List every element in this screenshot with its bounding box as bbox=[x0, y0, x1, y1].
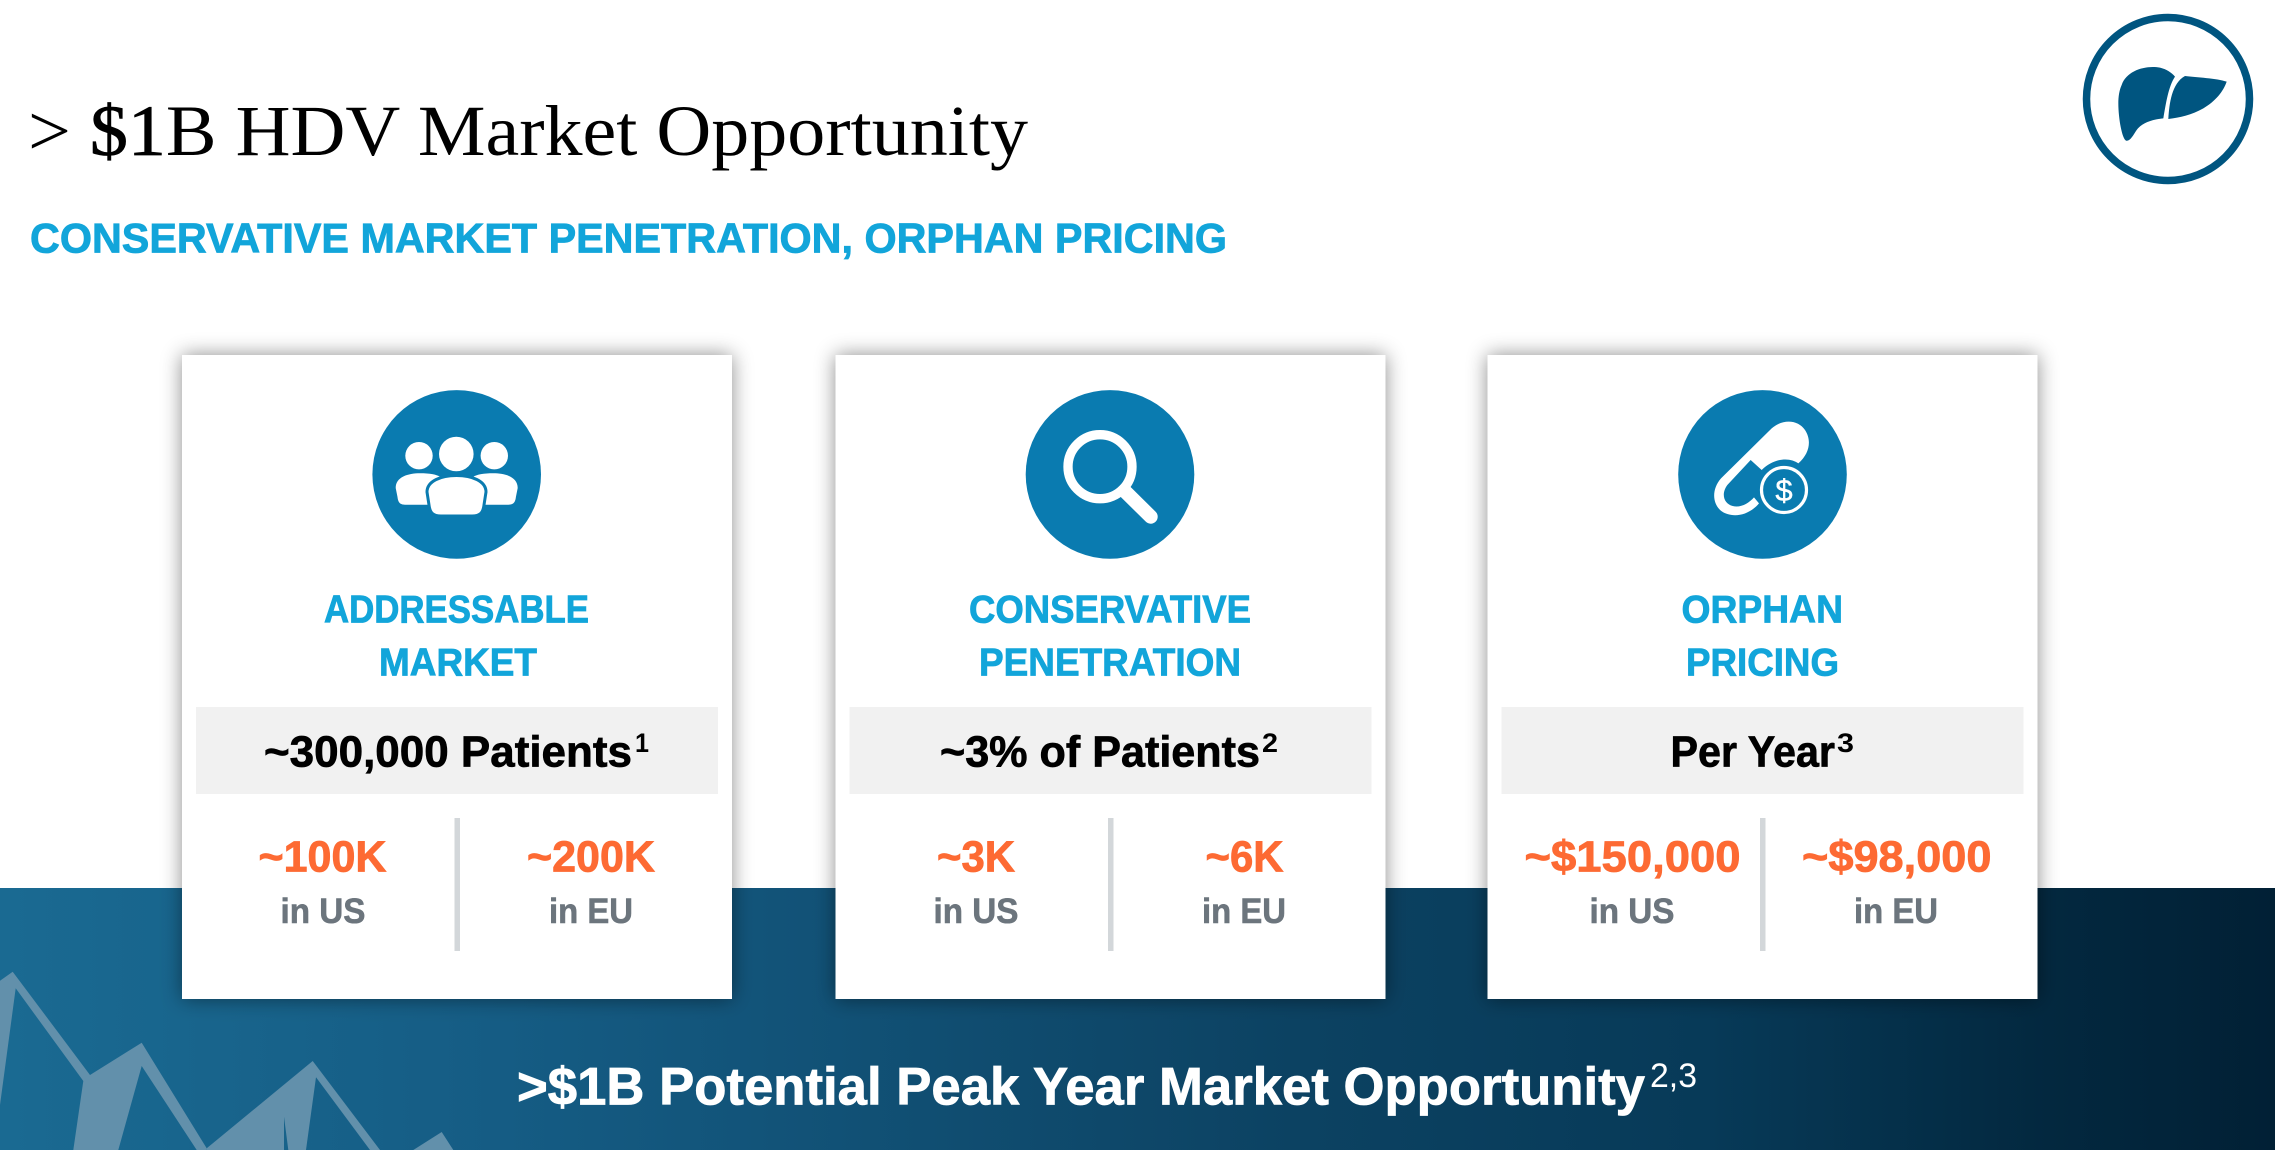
icon: liver logo bbox=[2086, 18, 2250, 180]
EU figure bbox=[527, 834, 656, 931]
heading bbox=[969, 588, 1251, 684]
key figure bar: ~3% of Patients bbox=[940, 728, 1260, 776]
footer statement: 2,3 bbox=[1650, 1057, 1697, 1095]
icon: pill and coin bbox=[1678, 390, 1847, 559]
heading: MARKET bbox=[379, 642, 537, 684]
EU figure: in EU bbox=[1202, 891, 1286, 931]
icon: people bbox=[372, 390, 541, 559]
EU figure: in EU bbox=[549, 891, 633, 931]
key figure bar: ~300,000 Patients bbox=[264, 728, 632, 776]
US figure: in US bbox=[934, 891, 1018, 931]
heading bbox=[1682, 588, 1843, 684]
key figure bar bbox=[850, 707, 1372, 794]
EU figure: ~$98,000 bbox=[1802, 834, 1992, 882]
title: > $1B HDV Market Opportunity bbox=[28, 91, 1028, 171]
EU figure: ~200K bbox=[527, 834, 656, 882]
US figure: in US bbox=[1590, 891, 1674, 931]
US figure: ~$150,000 bbox=[1524, 834, 1740, 882]
US figure bbox=[1524, 834, 1740, 931]
heading: PRICING bbox=[1686, 642, 1839, 684]
EU figure: in EU bbox=[1854, 891, 1938, 931]
key figure bar: 3 bbox=[1837, 728, 1854, 758]
US figure: in US bbox=[280, 891, 366, 931]
icon: magnifying glass bbox=[1026, 390, 1194, 559]
US figure: ~100K bbox=[258, 834, 387, 882]
heading: CONSERVATIVE bbox=[969, 588, 1251, 632]
EU figure bbox=[1802, 834, 1992, 931]
footer statement: >$1B Potential Peak Year Market Opportunity bbox=[517, 1058, 1646, 1116]
key figure bar: 1 bbox=[635, 728, 649, 758]
panel: orphan pricing bbox=[1488, 355, 2038, 999]
key figure bar bbox=[196, 707, 718, 794]
EU figure bbox=[1202, 834, 1286, 931]
key figure bar bbox=[1502, 707, 2024, 794]
key figure bar: 2 bbox=[1262, 728, 1278, 758]
heading: ADDRESSABLE bbox=[324, 588, 589, 632]
US figure bbox=[258, 834, 387, 931]
US figure bbox=[934, 834, 1018, 931]
panel: conservative penetration bbox=[836, 355, 1386, 999]
subtitle: CONSERVATIVE MARKET PENETRATION, ORPHAN PRICING bbox=[30, 214, 1227, 262]
heading: PENETRATION bbox=[979, 642, 1241, 684]
US figure: ~3K bbox=[937, 834, 1016, 882]
heading bbox=[324, 588, 589, 684]
key figure bar: Per Year bbox=[1670, 728, 1835, 776]
footer band bbox=[0, 888, 2275, 1150]
panel: addressable market bbox=[182, 355, 732, 999]
EU figure: ~6K bbox=[1206, 834, 1284, 882]
heading: ORPHAN bbox=[1682, 588, 1843, 632]
icon: pill and coin: $ bbox=[1775, 473, 1793, 508]
